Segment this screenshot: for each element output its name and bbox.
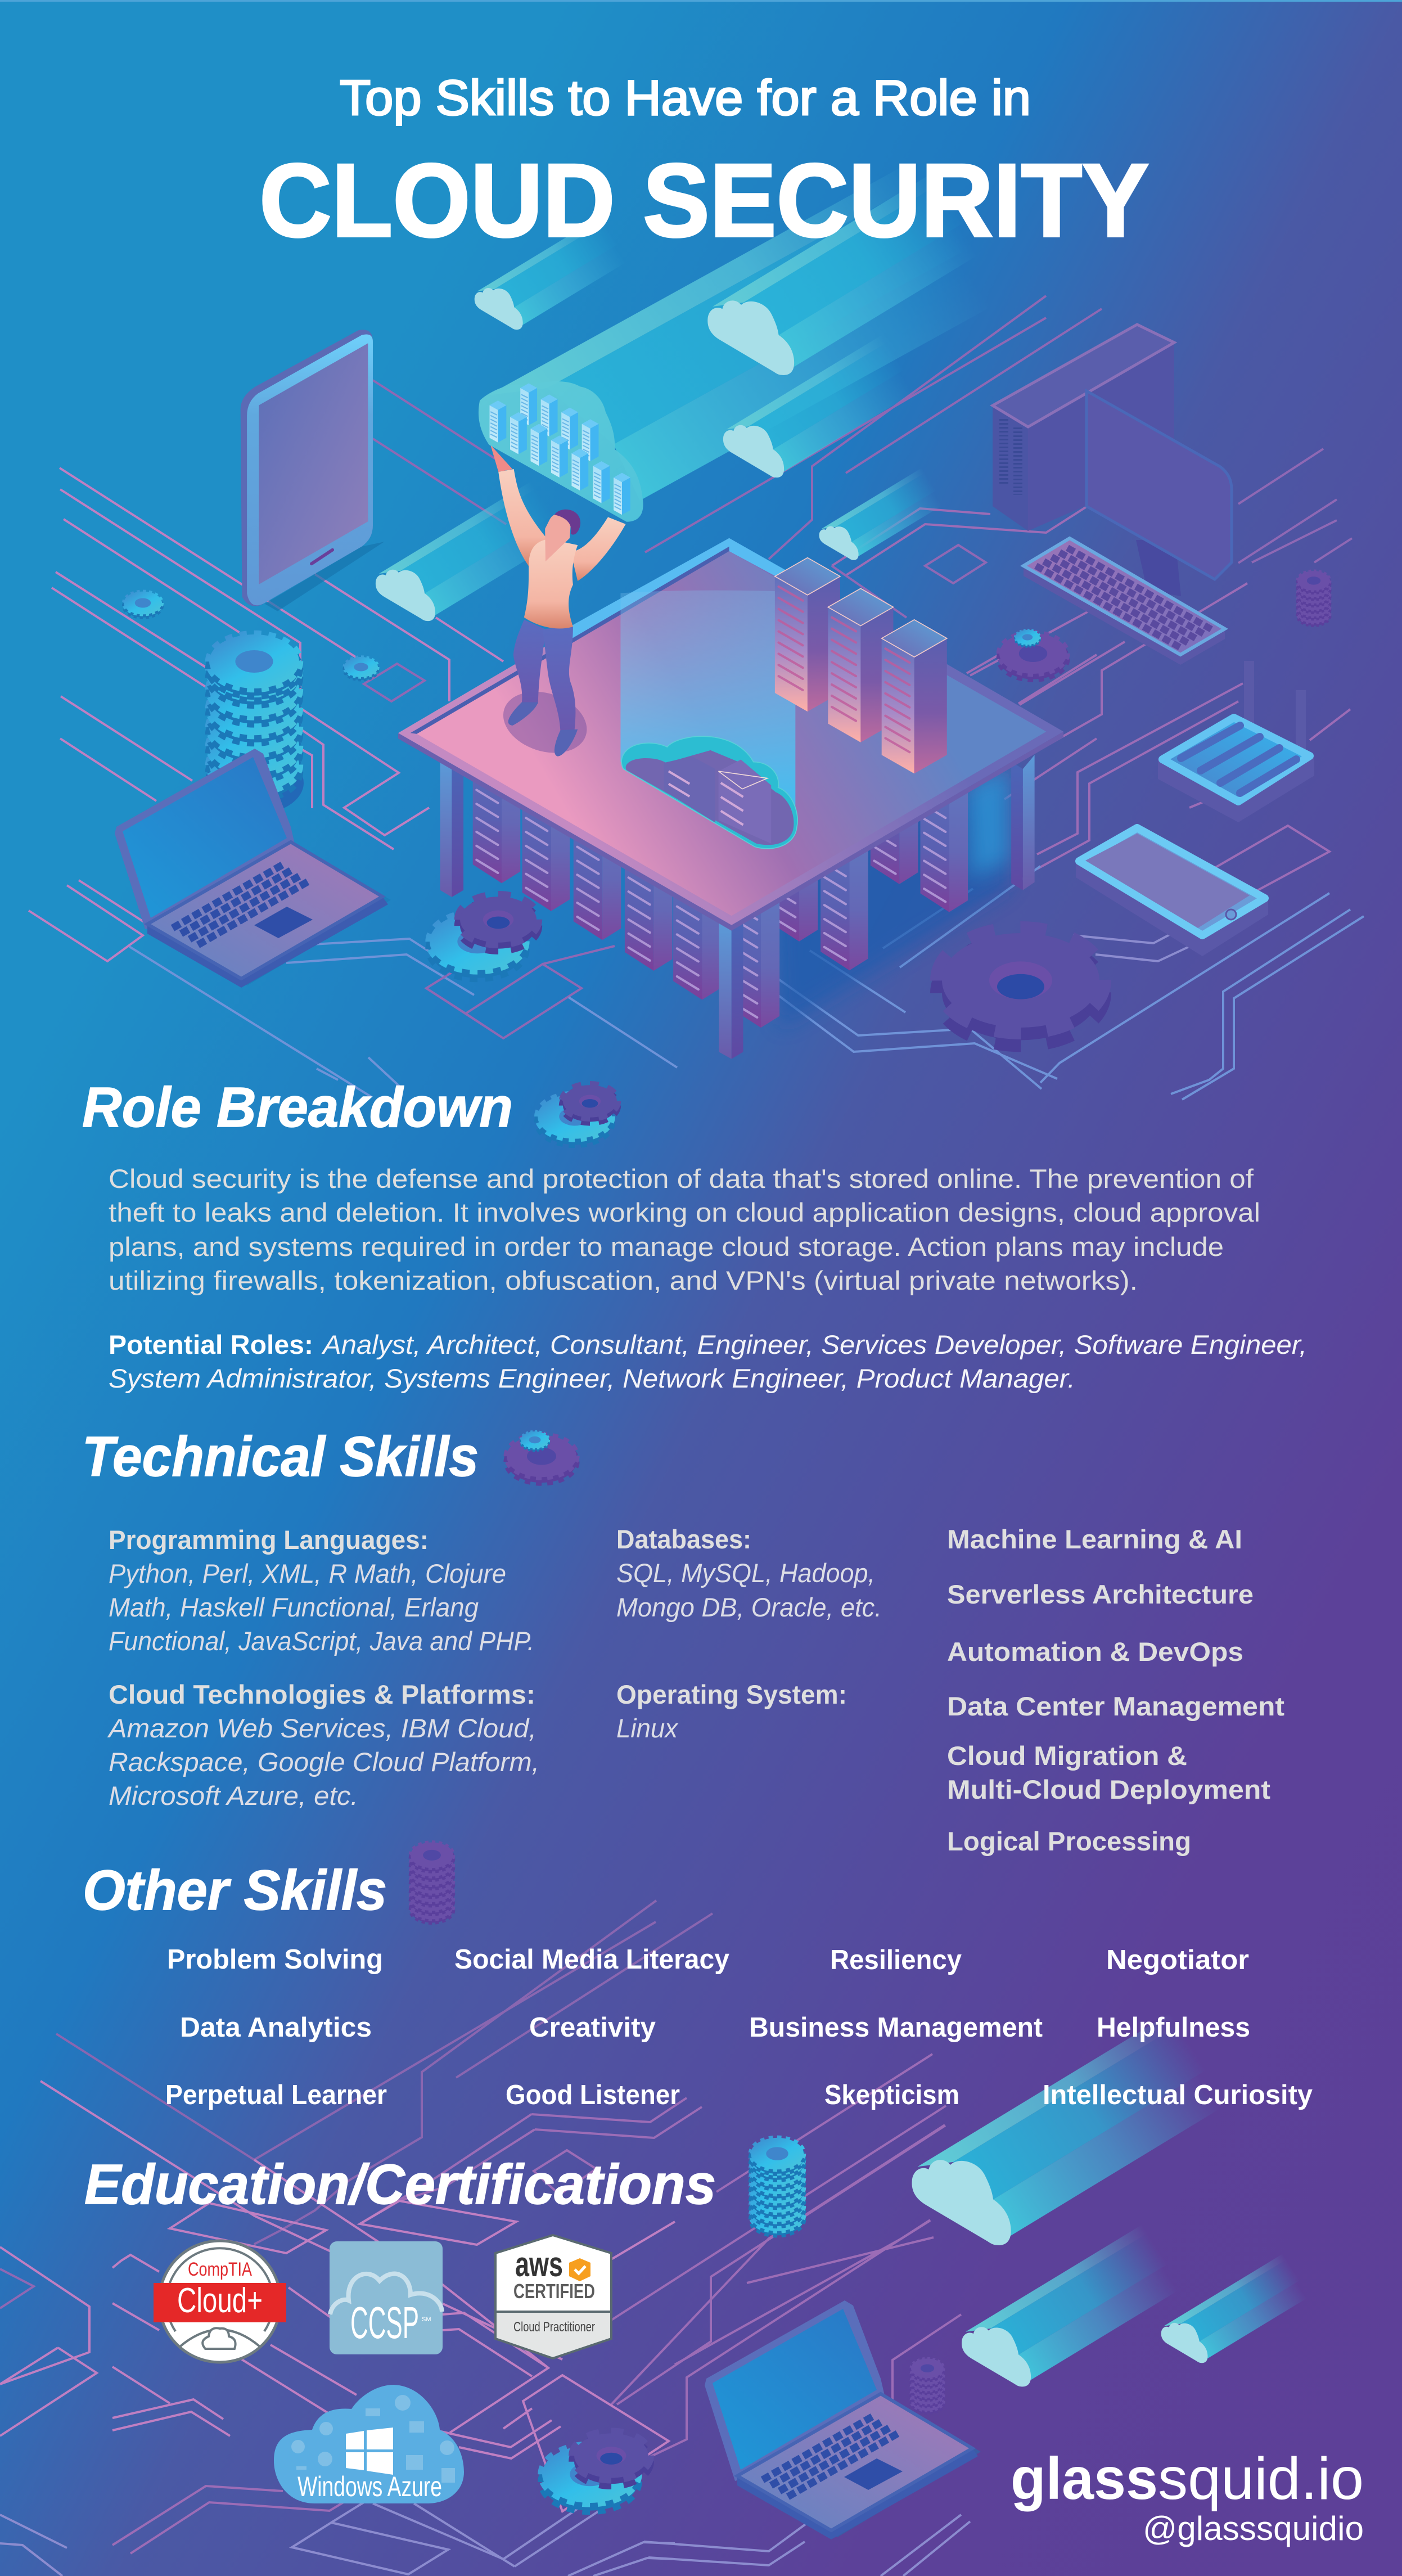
icon: blue gear stack <box>751 2138 804 2235</box>
skill grid: other skills: Negotiator <box>1106 1945 1249 1975</box>
skill group: databases <box>616 1524 882 1622</box>
logo: glasssquid.io <box>1011 2446 1364 2512</box>
skill list: technical right column: Machine Learning & AI <box>947 1524 1242 1554</box>
flying cloud: bottom small <box>1161 2249 1329 2363</box>
circuit lines: lower section <box>0 1901 970 2576</box>
logo: glasssquid.io: squid.io <box>1158 2446 1364 2512</box>
pillar: front <box>719 923 743 1059</box>
skill group: programming languages: Functional, JavaScript, Java and PHP. <box>109 1626 534 1656</box>
icon: keyboard <box>1024 538 1225 665</box>
badge: CompTIA Cloud+ <box>154 2241 286 2362</box>
icon: big purple gear <box>942 933 1099 1040</box>
skill grid: other skills: Helpfulness <box>1097 2012 1250 2043</box>
text block: potential roles <box>109 1330 1307 1393</box>
pillar: left <box>440 762 463 897</box>
flying cloud: bottom large <box>912 2003 1270 2245</box>
skill list: technical right column: Data Center Management <box>947 1691 1284 1721</box>
pillar: right <box>1011 755 1035 890</box>
circuit lines: upper illustration <box>29 296 1364 1100</box>
badge: CCSP: CCSP <box>350 2298 419 2348</box>
server racks under platform <box>473 724 968 1028</box>
hologram beam and cloud opening <box>620 591 797 849</box>
title: main line: CLOUD SECURITY <box>259 143 1149 259</box>
badge: CCSP <box>330 2241 443 2354</box>
title: subtitle line: Top Skills to Have for a Role in <box>340 70 1031 125</box>
skill group: operating system: Operating System: <box>616 1679 847 1709</box>
text block: potential roles: Analyst, Architect, Consultant, Engineer, Services Developer, Software Engineer, <box>321 1330 1307 1359</box>
skill grid: other skills: Skepticism <box>824 2080 959 2110</box>
skill group: programming languages: Python, Perl, XML, R Math, Clojure <box>109 1559 506 1588</box>
skill group: programming languages: Programming Languages: <box>109 1525 429 1555</box>
handle: @glasssquidio: @glasssquidio <box>1143 2510 1364 2547</box>
icon: heading gears <box>538 1085 617 1145</box>
skill group: programming languages: Math, Haskell Functional, Erlang <box>109 1592 479 1622</box>
badge: CompTIA Cloud+: CompTIA <box>188 2259 252 2280</box>
flying cloud: left of person <box>376 475 592 621</box>
skill grid: other skills: Intellectual Curiosity <box>1043 2080 1313 2110</box>
text block: role description <box>109 1164 1260 1295</box>
skill group: databases: Databases: <box>616 1524 751 1554</box>
skill group: cloud technologies: Rackspace, Google Cloud Platform, <box>109 1747 539 1777</box>
text block: potential roles: System Administrator, Systems Engineer, Network Engineer, Product Manager. <box>109 1363 1075 1393</box>
skill grid: other skills: Creativity <box>529 2012 656 2043</box>
badge: Windows Azure cloud <box>274 2385 464 2503</box>
central platform with servers and person <box>398 381 1063 1059</box>
text block: role description: theft to leaks and deletion. It involves working on cloud application designs, cloud approval <box>109 1197 1260 1227</box>
badge: CCSP: SM <box>422 2316 431 2323</box>
skill list: technical right column: Cloud Migration & <box>947 1741 1187 1771</box>
icon: purple gear stack <box>411 1843 453 1922</box>
skill group: programming languages <box>109 1525 534 1656</box>
icon: small purple stack bottom <box>911 2358 944 2413</box>
badge: AWS Certified Cloud Practitioner: CERTIFIED <box>513 2280 595 2303</box>
flying cloud: middle <box>723 329 944 478</box>
skill group: cloud technologies <box>107 1679 539 1811</box>
badge: CompTIA Cloud+: Cloud+ <box>177 2281 263 2320</box>
skill grid: other skills: Social Media Literacy <box>454 1944 729 1975</box>
skill group: operating system: Linux <box>616 1713 678 1743</box>
icon: bottom gears <box>542 2433 648 2511</box>
flying cloud: small near tower <box>819 464 962 560</box>
platform deck <box>398 538 1063 931</box>
skill list: technical right column: Serverless Architecture <box>947 1579 1254 1609</box>
icon: left laptop <box>115 749 391 988</box>
heading: Other Skills: Other Skills <box>83 1859 387 1922</box>
heading: Education/Certifications: Education/Certifications <box>84 2153 716 2216</box>
icon: tiny gear left <box>124 592 162 618</box>
shadow beneath platform <box>776 767 1009 1028</box>
icon: computer tower and monitor <box>993 325 1232 596</box>
skill list: technical right column: Logical Processing <box>947 1826 1191 1856</box>
skill group: cloud technologies: Cloud Technologies & Platforms: <box>109 1679 535 1709</box>
skill grid: other skills: Resiliency <box>830 1945 962 1975</box>
skill list: technical right column: Multi-Cloud Deployment <box>947 1775 1270 1804</box>
badge: AWS Certified Cloud Practitioner: Cloud Practitioner <box>513 2320 595 2335</box>
skill group: operating system <box>616 1679 847 1743</box>
flying cloud: large <box>707 164 1021 375</box>
badge: Windows Azure cloud: Windows Azure <box>297 2471 442 2502</box>
text block: potential roles: Potential Roles: <box>109 1330 313 1359</box>
icon: bottom laptop <box>705 2300 981 2539</box>
skill group: cloud technologies: Amazon Web Services, IBM Cloud, <box>107 1713 537 1743</box>
flying cloud: top small <box>475 211 650 330</box>
skill group: cloud technologies: Microsoft Azure, etc. <box>109 1781 358 1811</box>
skill list: technical right column: Automation & DevOps <box>947 1637 1243 1667</box>
person lifting cloud <box>490 445 626 756</box>
icon: small gears top right <box>999 630 1067 679</box>
icon: small purple gear stack <box>1297 571 1330 625</box>
icon: tablet <box>241 330 384 611</box>
skill grid: other skills: Data Analytics <box>180 2012 372 2043</box>
text block: role description: utilizing firewalls, tokenization, obfuscation, and VPN's (virtual private networks). <box>109 1266 1138 1295</box>
skill grid: other skills <box>165 1944 1313 2110</box>
person shadow <box>495 682 595 763</box>
skill grid: other skills: Perpetual Learner <box>165 2080 387 2110</box>
text block: role description: Cloud security is the defense and protection of data that's stored online. The prevention of <box>109 1164 1254 1194</box>
badge: AWS Certified Cloud Practitioner <box>495 2235 611 2358</box>
icon: gear stack left <box>205 634 304 814</box>
flying cloud: bottom medium <box>962 2218 1212 2386</box>
icon: technical skills gears <box>507 1431 576 1483</box>
skill grid: other skills: Problem Solving <box>167 1944 383 1975</box>
icon: gears under platform <box>430 897 537 978</box>
icon: phone <box>1076 828 1268 956</box>
heading: Role Breakdown: Role Breakdown <box>82 1076 513 1139</box>
icon: tiny gear centre left <box>344 657 378 680</box>
badge: AWS Certified Cloud Practitioner: aws <box>515 2245 563 2284</box>
title <box>259 70 1149 259</box>
skill group: databases: SQL, MySQL, Hadoop, <box>616 1558 875 1588</box>
skill list: technical right column <box>947 1524 1284 1856</box>
skill grid: other skills: Good Listener <box>506 2080 680 2110</box>
heading: Technical Skills: Technical Skills <box>82 1425 479 1488</box>
skill grid: other skills: Business Management <box>749 2012 1043 2043</box>
held cloud with mini servers <box>479 381 643 522</box>
text block: role description: plans, and systems required in order to manage cloud storage. Action plans may include <box>109 1232 1224 1262</box>
icon: router <box>1158 661 1314 822</box>
skill group: databases: Mongo DB, Oracle, etc. <box>616 1592 882 1622</box>
servers on platform <box>775 558 947 773</box>
logo: glasssquid.io: glass <box>1011 2446 1158 2512</box>
streak: behind held cloud <box>488 149 1073 501</box>
